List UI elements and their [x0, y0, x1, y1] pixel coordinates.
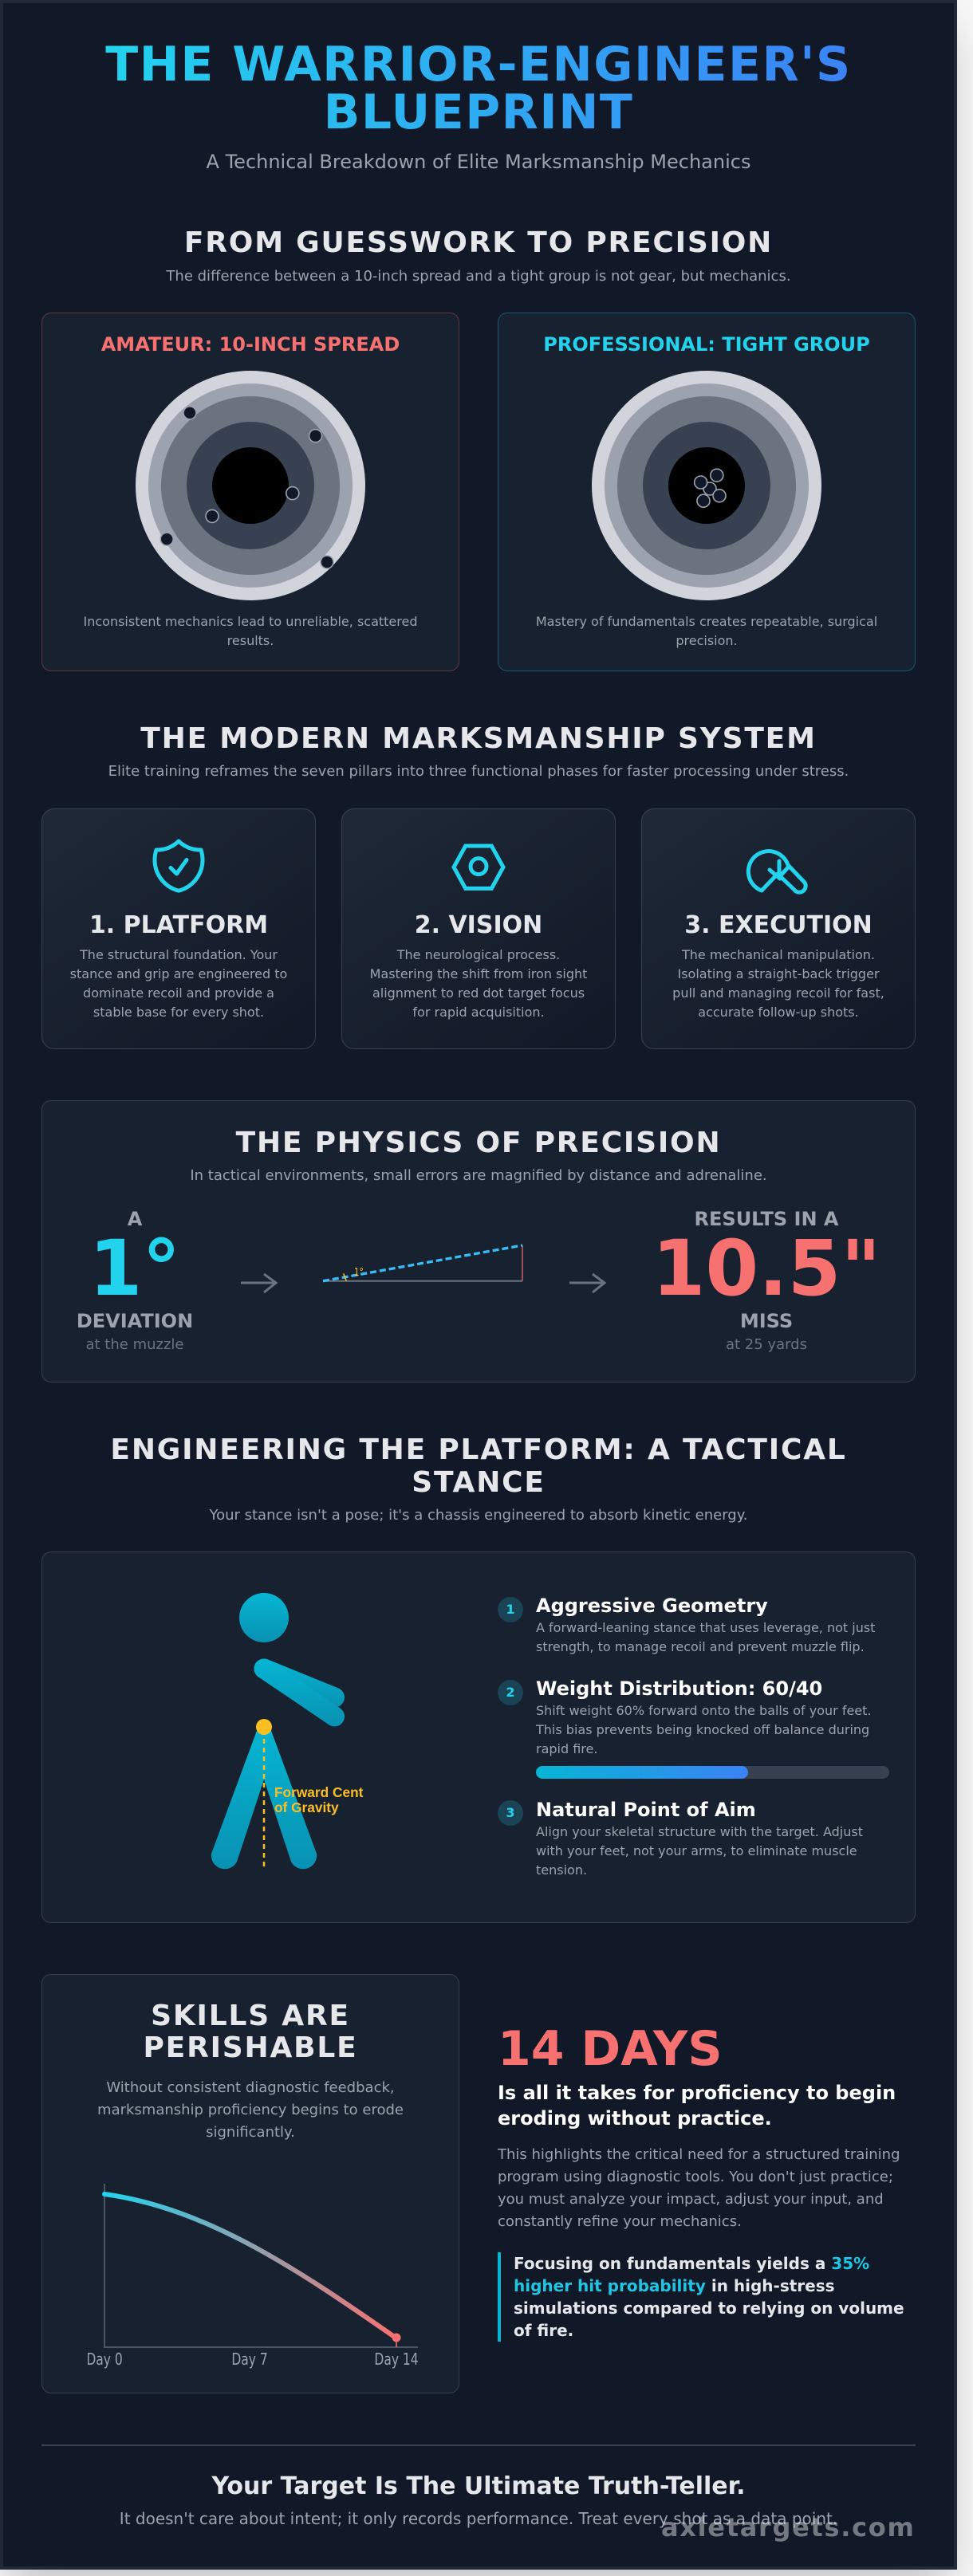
divider — [41, 2444, 916, 2446]
panel: physics of precision — [41, 1100, 916, 1382]
perishable description — [97, 2079, 404, 2141]
execution description: Isolating a straight-back trigger — [677, 966, 879, 981]
amateur heading: AMATEUR: 10-INCH SPREAD — [101, 333, 400, 356]
stat: 14 days: 14 DAYS — [498, 2021, 723, 2077]
panel: vision — [341, 808, 616, 1049]
execution description — [672, 947, 884, 1020]
statement: proficiency erosion — [498, 2082, 896, 2130]
progress bar 60 percent — [536, 1766, 889, 1779]
vision description: The neurological process. — [397, 947, 560, 962]
vision description: alignment to red dot target focus — [372, 985, 585, 1001]
number 1: 1 — [506, 1602, 515, 1617]
item description: with your feet, not your arms, to eliminate muscle — [536, 1843, 857, 1858]
chart: proficiency decay curve: Day 7 — [231, 2350, 268, 2370]
item description: strength, to manage recoil and prevent muzzle flip. — [536, 1639, 865, 1654]
stat: ten point five inch miss — [652, 1208, 880, 1353]
execution heading: 3. EXECUTION — [684, 910, 873, 939]
perishable heading: PERISHABLE — [144, 2031, 357, 2064]
item: weight distribution — [498, 1677, 889, 1779]
icon: hexagon sight — [451, 844, 506, 891]
perishable description: marksmanship proficiency begins to erode — [97, 2102, 404, 2118]
note 25 yards: at 25 yards — [726, 1336, 807, 1353]
diagram: angle triangle: 1° — [354, 1266, 364, 1278]
statement: proficiency erosion: Is all it takes for proficiency to begin — [498, 2082, 896, 2104]
panel: amateur target — [41, 313, 459, 671]
callout: 35 percent higher hit probability: higher hit probability in high-stress — [514, 2276, 835, 2295]
closing statement: Your Target Is The Ultimate Truth-Teller. — [211, 2472, 746, 2500]
section intro: stance: Your stance isn't a pose; it's a chassis engineered to absorb kinetic energy. — [209, 1507, 748, 1523]
body text: training: program using diagnostic tools. You don't just practice; — [498, 2169, 893, 2185]
closing note: It doesn't care about intent; it only records performance. Treat every shot as a data point. — [120, 2509, 837, 2528]
chart: proficiency decay curve — [88, 2184, 419, 2370]
physics intro: In tactical environments, small errors are magnified by distance and adrenaline. — [190, 1167, 767, 1184]
panel: skills are perishable — [41, 1974, 459, 2393]
callout: 35 percent higher hit probability: Focusing on fundamentals yields a 35% — [514, 2254, 869, 2273]
statement: proficiency erosion: eroding without practice. — [498, 2107, 772, 2130]
heading: from guesswork to precision: FROM GUESSWORK TO PRECISION — [184, 226, 773, 258]
execution description: pull and managing recoil for fast, — [672, 985, 884, 1001]
panel: execution — [641, 808, 916, 1049]
chart: proficiency decay curve: Day 14 — [374, 2350, 419, 2370]
perishable description: significantly. — [206, 2124, 295, 2141]
vision heading: 2. VISION — [415, 910, 542, 939]
platform description: dominate recoil and provide a — [83, 985, 274, 1001]
amateur caption — [83, 614, 418, 648]
callout: 35 percent higher hit probability: of fire. — [514, 2321, 573, 2340]
amateur caption: Inconsistent mechanics lead to unreliable, scattered — [83, 614, 418, 629]
note muzzle: at the muzzle — [86, 1336, 183, 1353]
body text: training: This highlights the critical need for a structured training — [498, 2146, 900, 2163]
title — [96, 41, 861, 138]
item description: rapid fire. — [536, 1741, 597, 1756]
item heading: Natural Point of Aim — [536, 1799, 756, 1821]
platform description: stance and grip are engineered to — [70, 966, 287, 981]
label deviation: DEVIATION — [77, 1310, 193, 1332]
section intro: guesswork: The difference between a 10-inch spread and a tight group is not gear, but mechanics. — [166, 268, 791, 285]
arrow — [569, 1272, 606, 1293]
label miss: MISS — [740, 1310, 793, 1332]
professional heading: PROFESSIONAL: TIGHT GROUP — [543, 333, 870, 356]
label a: A — [128, 1208, 142, 1230]
heading: modern marksmanship system: THE MODERN MARKSMANSHIP SYSTEM — [140, 722, 817, 754]
panel: tactical stance — [41, 1551, 916, 1923]
platform heading: 1. PLATFORM — [89, 910, 268, 939]
subtitle: A Technical Breakdown of Elite Marksmanship Mechanics — [207, 151, 750, 173]
panel: professional target — [498, 313, 916, 671]
execution description: The mechanical manipulation. — [682, 947, 875, 962]
number 1 — [498, 1597, 523, 1622]
item description: A forward-leaning stance that uses leverage, not just — [536, 1620, 875, 1635]
number 3 — [498, 1800, 523, 1826]
label results in a: RESULTS IN A — [695, 1208, 838, 1230]
title: THE WARRIOR-ENGINEER'S — [105, 37, 852, 92]
panel: platform — [41, 808, 316, 1049]
item: aggressive geometry — [498, 1595, 875, 1654]
title: BLUEPRINT — [324, 85, 633, 140]
platform description: The structural foundation. Your — [80, 947, 278, 962]
professional caption — [536, 614, 877, 648]
number 2 — [498, 1680, 523, 1705]
body text: training: you must analyze your impact, adjust your input, and — [498, 2191, 884, 2208]
diagram: angle triangle — [322, 1244, 523, 1282]
vision description: Mastering the shift from iron sight — [370, 966, 587, 981]
target with scattered shots — [136, 371, 365, 600]
watermark: axletargets.com — [661, 2511, 915, 2542]
arrow — [241, 1272, 278, 1293]
number 2: 2 — [506, 1685, 515, 1700]
target with tight group — [592, 371, 821, 600]
heading: engineering the platform: STANCE — [412, 1465, 546, 1499]
item description: tension. — [536, 1862, 587, 1878]
amateur caption: results. — [227, 633, 274, 648]
item description: Align your skeletal structure with the target. Adjust — [536, 1824, 863, 1839]
physics heading: THE PHYSICS OF PRECISION — [236, 1126, 721, 1159]
heading: engineering the platform — [110, 1434, 847, 1499]
professional caption: Mastery of fundamentals creates repeatable, surgical — [536, 614, 877, 629]
item description — [536, 1824, 863, 1878]
icon: shield check — [153, 839, 204, 893]
value 10.5 inches: 10.5" — [652, 1224, 880, 1313]
platform description: stable base for every shot. — [93, 1005, 264, 1020]
diagram: shooter stance figure — [211, 1593, 364, 1869]
number 3: 3 — [506, 1805, 515, 1820]
value one degree: 1° — [89, 1224, 180, 1313]
body text: training — [498, 2146, 900, 2230]
callout: 35 percent higher hit probability: simulations compared to relying on volume — [514, 2299, 904, 2318]
item description: Shift weight 60% forward onto the balls of your feet. — [536, 1703, 872, 1718]
body text: training: constantly refine your mechanics. — [498, 2213, 742, 2230]
perishable heading — [144, 2000, 357, 2064]
diagram: shooter stance figure: of Gravity — [274, 1799, 339, 1815]
item heading: Weight Distribution: 60/40 — [536, 1677, 822, 1700]
icon: trigger tool — [746, 849, 808, 895]
item description: This bias prevents being knocked off balance during — [536, 1722, 869, 1737]
professional caption: precision. — [676, 633, 738, 648]
platform description — [70, 947, 287, 1020]
item: natural point of aim — [498, 1799, 863, 1878]
section intro: system: Elite training reframes the seven pillars into three functional phases for faster processing under stress. — [108, 763, 849, 780]
vision description — [370, 947, 587, 1020]
vision description: for rapid acquisition. — [412, 1005, 545, 1020]
heading: engineering the platform: ENGINEERING THE PLATFORM: A TACTICAL — [110, 1434, 847, 1465]
perishable heading: SKILLS ARE — [151, 2000, 350, 2032]
perishable description: Without consistent diagnostic feedback, — [106, 2079, 395, 2096]
item heading: Aggressive Geometry — [536, 1595, 768, 1617]
callout: 35 percent higher hit probability — [498, 2252, 916, 2342]
execution description: accurate follow-up shots. — [698, 1005, 859, 1020]
stat: one degree deviation — [77, 1208, 193, 1353]
item description — [536, 1620, 875, 1654]
item description — [536, 1703, 872, 1756]
